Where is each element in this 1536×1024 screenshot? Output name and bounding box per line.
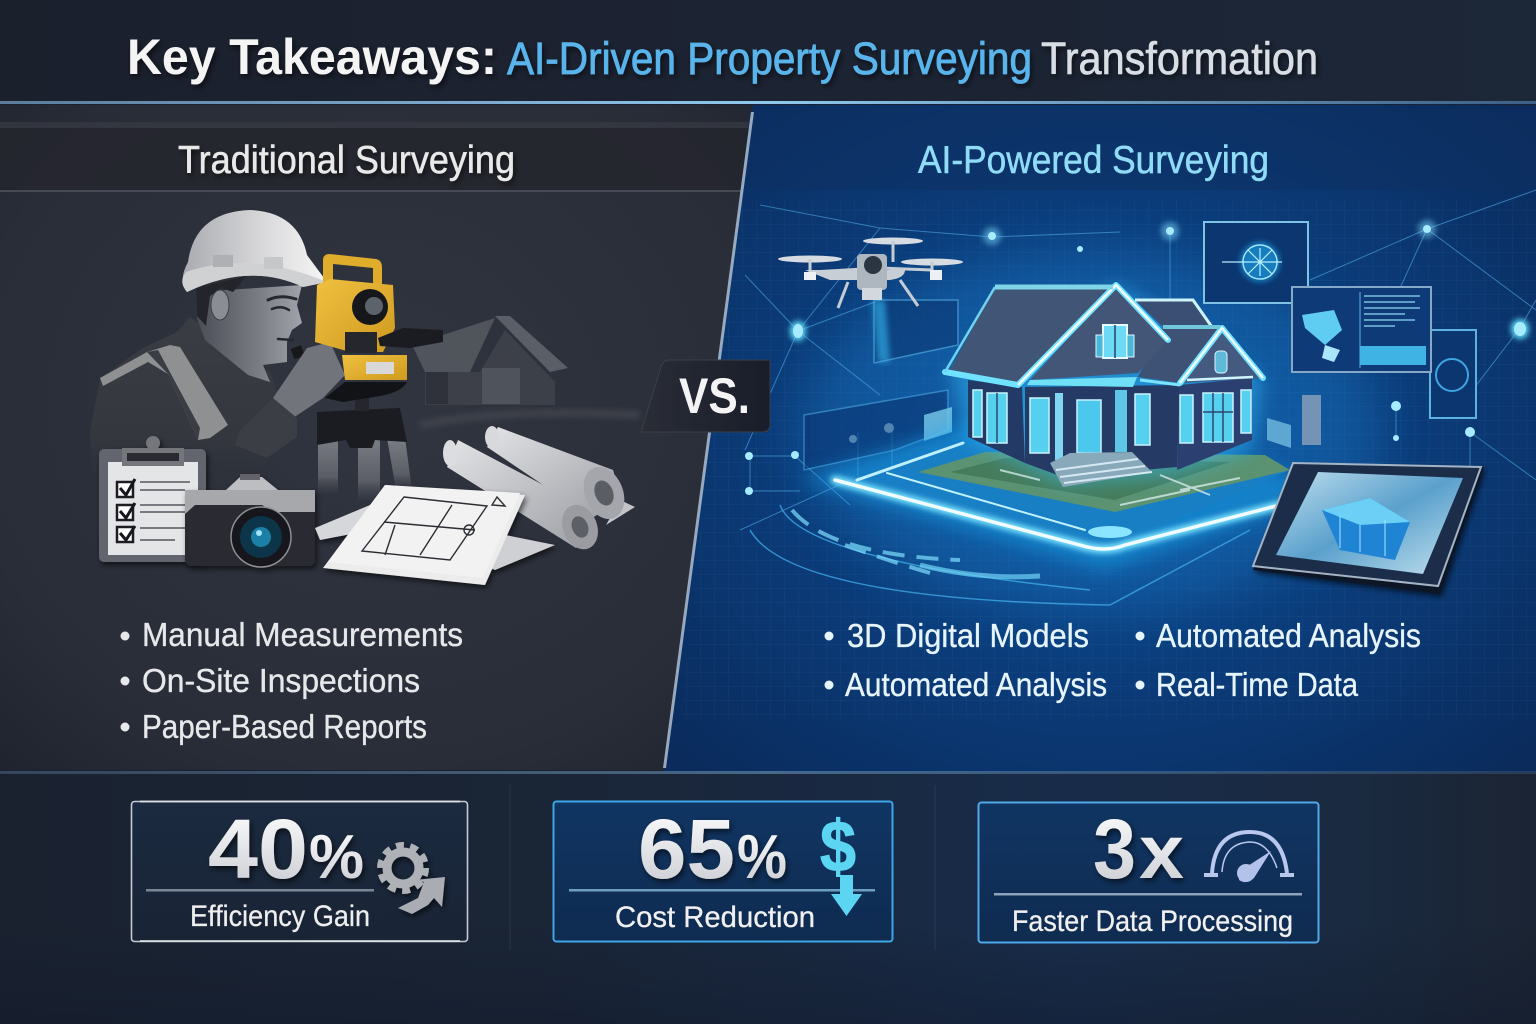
panel: ai-powered surveying [663, 105, 1536, 772]
upper roll [487, 427, 622, 518]
stat card: faster data processing: x [1139, 810, 1184, 895]
stat card: faster data processing: Faster Data Processing [1012, 905, 1293, 938]
safety vest stripes [100, 345, 228, 440]
tripod [317, 397, 412, 500]
neck and head [196, 285, 302, 382]
ai bullet list: Automated Analysis [845, 666, 1107, 703]
title: Key Takeaways: [127, 29, 497, 85]
arm and hand [273, 342, 345, 418]
panel edge highlight [663, 112, 754, 768]
stat card: efficiency gain: % [309, 823, 364, 892]
icon: gear with arrow [380, 845, 445, 914]
icon: tablet [1253, 463, 1484, 594]
house walls [968, 378, 1252, 477]
title: AI-Driven Property Surveying [507, 33, 1032, 84]
traditional bullet list [120, 616, 463, 745]
house roofs [945, 285, 1263, 387]
ai heading band: AI-Powered Surveying [918, 139, 1269, 182]
header band [0, 0, 1536, 101]
worker torso [90, 317, 297, 490]
porch steps [1050, 452, 1152, 487]
ai bullet list: 3D Digital Models [847, 617, 1089, 654]
statistics band [0, 771, 1536, 1024]
icon: site plan papers [315, 485, 555, 585]
stat card: cost reduction: % [737, 823, 787, 892]
beam panel under drone [874, 300, 958, 363]
ear [211, 290, 229, 320]
network lines and nodes [740, 190, 1536, 530]
icon: rolled blueprints [443, 426, 635, 555]
traditional bullet list: On-Site Inspections [142, 662, 420, 699]
holographic data panels [804, 222, 1476, 470]
traditional heading band [0, 122, 750, 192]
panel: traditional surveying [0, 105, 753, 770]
traditional bullet list: Paper-Based Reports [142, 708, 427, 745]
traditional bullet list: Manual Measurements [142, 616, 463, 653]
stat card: faster data processing [978, 802, 1318, 942]
ai bullet list [824, 617, 1421, 703]
ai bullet list: Automated Analysis [1156, 617, 1421, 654]
windows [973, 390, 1251, 453]
stat card: cost reduction: 65 [638, 802, 735, 896]
stat card: cost reduction [553, 802, 892, 942]
stat card: efficiency gain [132, 802, 468, 942]
stat card: cost reduction: Cost Reduction [615, 901, 815, 934]
icon: drone [778, 238, 963, 362]
icon: glowing 3D house [945, 285, 1263, 505]
icon: holographic platform [750, 400, 1340, 605]
hair [196, 276, 245, 326]
ai bullet list: Real-Time Data [1156, 666, 1359, 703]
title [127, 29, 1318, 85]
title: Transformation [1041, 33, 1318, 84]
data panel: dashboard [1292, 287, 1476, 418]
ground panel [804, 390, 948, 470]
data panel: radial scan [1204, 222, 1308, 303]
stat card: efficiency gain: 40 [208, 802, 308, 896]
stat card: faster data processing: 3 [1093, 802, 1136, 896]
upper window [1103, 325, 1127, 358]
icon: clipboard checklist [99, 436, 206, 562]
ai heading band [741, 110, 1536, 190]
lower roll [447, 440, 595, 548]
icon: camera [185, 474, 315, 567]
icon: speedometer [1204, 832, 1294, 882]
paper flap [606, 500, 635, 525]
grass sparkles [1000, 470, 1240, 505]
icon: dollar with down arrow [820, 807, 862, 916]
traditional heading band: Traditional Surveying [178, 139, 515, 182]
vs badge [641, 360, 770, 432]
icon: total station on tripod [315, 254, 443, 500]
stat card: efficiency gain: Efficiency Gain [190, 900, 370, 933]
icon: surveyor worker [90, 210, 345, 490]
facial features [268, 297, 296, 340]
back roof [1135, 300, 1212, 327]
hard hat [182, 210, 327, 292]
ghost house [412, 316, 640, 425]
vs badge: VS. [679, 368, 750, 424]
icon: dollar with down arrow: $ [820, 807, 856, 887]
